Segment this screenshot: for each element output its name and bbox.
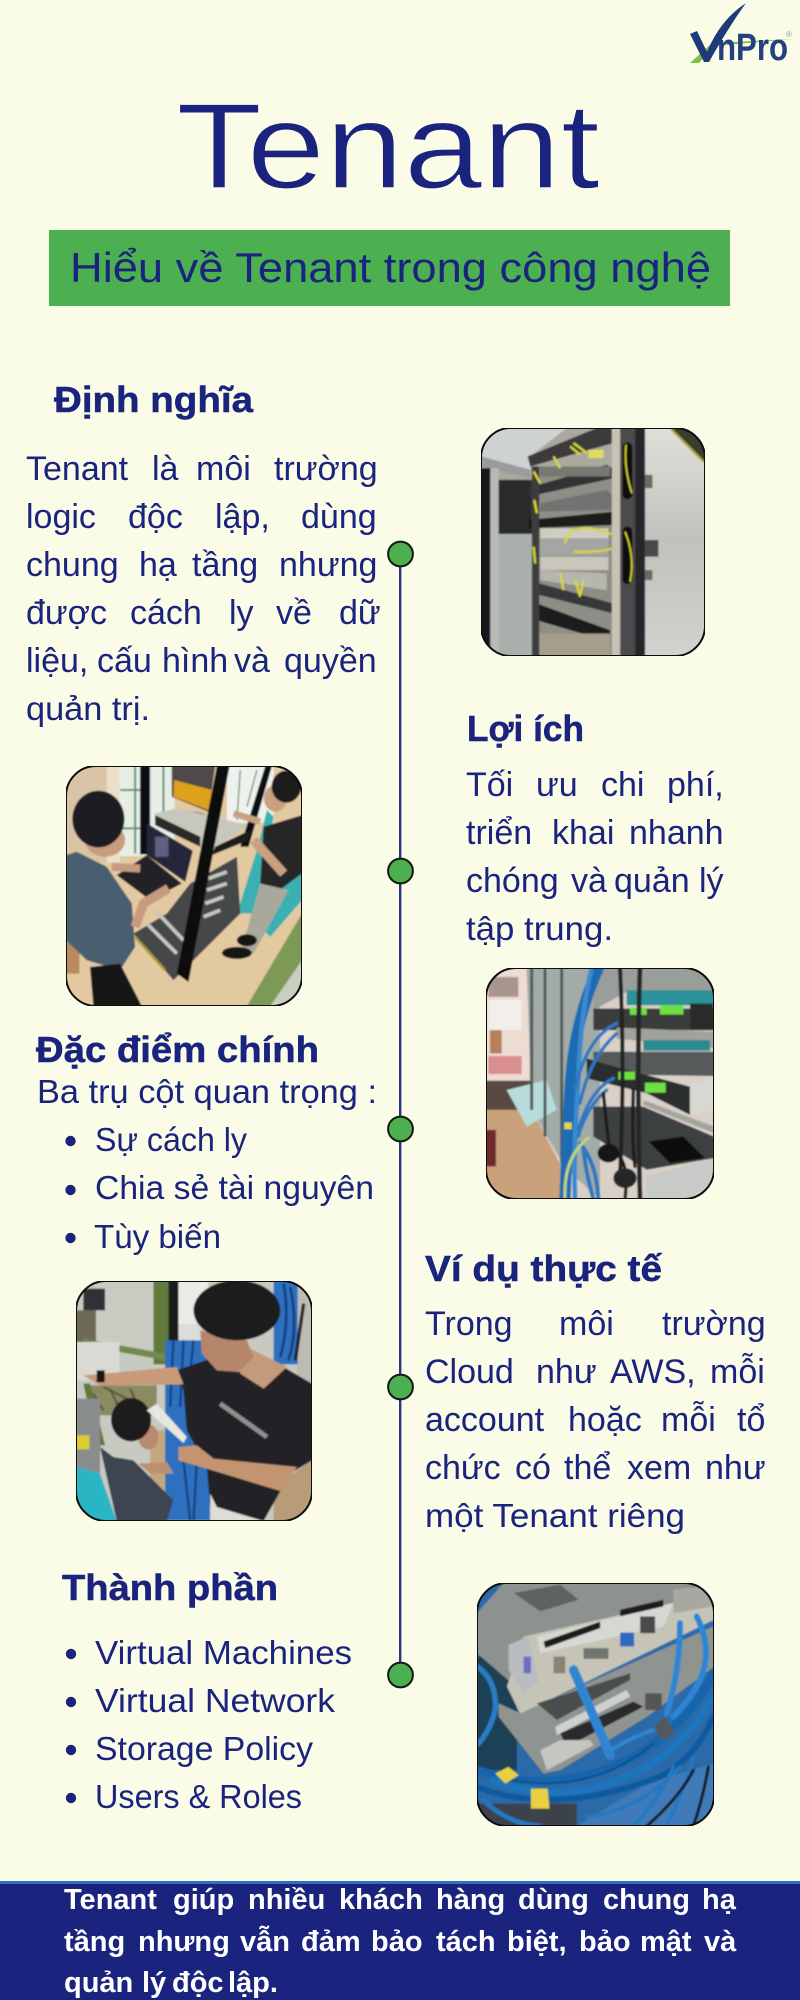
text: benefits: quản	[614, 862, 690, 900]
footer text: nhiều	[248, 1884, 325, 1916]
footer text: đảm	[301, 1926, 361, 1958]
list: components: Users & Roles	[95, 1778, 302, 1815]
footer text: hàng	[436, 1884, 505, 1916]
section: Đặc điểm chính	[36, 1029, 377, 1255]
footer text: tầng	[64, 1926, 125, 1958]
text: definition: tầng	[192, 546, 258, 584]
photo: server back panels and blue cables	[477, 1583, 714, 1827]
text: example: như	[536, 1353, 597, 1391]
footer text: vẫn	[240, 1924, 290, 1958]
photo: servers with blue cables	[486, 968, 714, 1199]
photo: two engineers at a rack	[66, 766, 302, 1006]
text: definition: quyền	[284, 642, 377, 680]
text: benefits: triển	[466, 814, 532, 852]
heading: Định nghĩa: Định nghĩa	[54, 379, 254, 420]
logo: VnPro: ®	[786, 30, 792, 39]
text: example: AWS,	[610, 1353, 696, 1391]
heading: Ví dụ thực tế: Ví dụ thực tế	[425, 1248, 663, 1289]
footer text: mật	[640, 1926, 692, 1958]
text: example	[425, 1305, 766, 1534]
footer text: biệt,	[507, 1926, 567, 1958]
timeline	[388, 542, 413, 1687]
section: Lợi ích	[466, 708, 724, 947]
footer text: độc	[172, 1967, 224, 1999]
footer text: hạ	[702, 1884, 737, 1916]
text: example: mỗi	[661, 1401, 716, 1439]
footer text: dùng	[518, 1884, 589, 1916]
text: definition: dữ	[339, 594, 381, 632]
section: Ví dụ thực tế	[425, 1248, 766, 1534]
list: components: Storage Policy	[95, 1730, 314, 1767]
text: example: mỗi	[710, 1353, 765, 1391]
title: Tenant	[176, 78, 600, 214]
text: example: trường	[662, 1305, 766, 1343]
text: benefits: ưu	[536, 766, 578, 804]
text: definition: ly	[229, 594, 254, 632]
text: benefits: Tối	[466, 766, 513, 804]
subtitle banner	[49, 230, 730, 306]
footer band	[0, 1881, 800, 2000]
text: definition: cấu	[97, 642, 152, 680]
text: example: chức	[425, 1449, 501, 1487]
text: definition: về	[276, 594, 312, 632]
text: intro line: Ba trụ cột quan trọng :	[37, 1073, 377, 1110]
text: benefits: lý	[699, 862, 724, 900]
text: benefits	[466, 766, 724, 947]
text: example: Trong	[425, 1305, 513, 1343]
footer text: chung	[603, 1884, 690, 1916]
footer text: giúp	[173, 1884, 234, 1916]
text: definition: quản trị.	[26, 690, 150, 727]
text: example: Cloud	[425, 1353, 514, 1391]
text: example: như	[705, 1449, 766, 1487]
text: definition: môi	[196, 450, 251, 488]
logo: VnPro	[690, 3, 793, 69]
text: benefits: nhanh	[629, 814, 724, 852]
text: definition: trường	[274, 450, 378, 488]
text: definition: Tenant	[26, 450, 129, 488]
text: benefits: tập trung.	[466, 910, 613, 947]
text: definition: được	[26, 594, 107, 632]
footer text: Tenant	[64, 1884, 157, 1916]
footer text: tách	[436, 1926, 496, 1958]
list: three pillars	[65, 1121, 374, 1255]
footer text: khách	[339, 1884, 423, 1916]
text: example: xem	[627, 1449, 691, 1487]
photo: engineers cabling a rack	[76, 1280, 312, 1521]
list: components	[66, 1634, 352, 1815]
heading: Đặc điểm chính: Đặc điểm chính	[36, 1029, 319, 1070]
text: definition: hạ	[139, 546, 177, 584]
text: definition: và	[234, 642, 270, 680]
text: example: hoặc	[568, 1401, 642, 1439]
text: benefits: phí,	[667, 766, 724, 804]
heading: Thành phần: Thành phần	[62, 1567, 278, 1608]
text: definition: hình	[162, 642, 228, 680]
subtitle banner: Hiểu về Tenant trong công nghệ	[70, 244, 711, 291]
list: three pillars: Tùy biến	[94, 1218, 221, 1255]
text: example: tổ	[737, 1401, 765, 1439]
section: Thành phần	[62, 1567, 352, 1815]
text: definition: liệu,	[26, 642, 88, 680]
text: definition: dùng	[301, 498, 377, 536]
text: example: thể	[564, 1449, 611, 1487]
text: definition	[26, 450, 381, 727]
list: components: Virtual Machines	[95, 1634, 352, 1671]
footer text: lập.	[228, 1967, 278, 1999]
text: example: có	[515, 1449, 551, 1487]
text: definition: logic	[26, 498, 96, 536]
text: definition: lập,	[215, 498, 270, 536]
list: three pillars: Sự cách ly	[95, 1121, 247, 1158]
text: example: account	[425, 1401, 545, 1439]
list: components: Virtual Network	[95, 1682, 336, 1719]
list: three pillars: Chia sẻ tài nguyên	[95, 1169, 374, 1206]
text: example: một Tenant riêng	[425, 1497, 685, 1534]
section: Định nghĩa	[26, 379, 381, 727]
footer text: và	[704, 1926, 737, 1958]
text: definition: chung	[26, 546, 119, 584]
text: example: môi	[559, 1305, 614, 1343]
text: benefits: khai	[552, 814, 614, 852]
text: definition: độc	[128, 498, 183, 536]
text: definition: nhưng	[279, 546, 377, 584]
text: benefits: chóng	[466, 862, 559, 900]
text: benefits: chi	[601, 766, 644, 804]
text: definition: cách	[130, 594, 202, 632]
footer text: bảo	[371, 1926, 423, 1958]
footer text: lý	[142, 1967, 166, 1999]
footer text: bảo	[579, 1926, 631, 1958]
text: definition: là	[152, 450, 179, 488]
heading: Lợi ích: Lợi ích	[467, 708, 584, 749]
footer text: nhưng	[138, 1926, 230, 1958]
text: benefits: và	[571, 862, 607, 900]
photo: network rack with yellow cables	[481, 428, 705, 656]
footer text	[64, 1884, 737, 1999]
footer text: quản	[64, 1967, 133, 1999]
